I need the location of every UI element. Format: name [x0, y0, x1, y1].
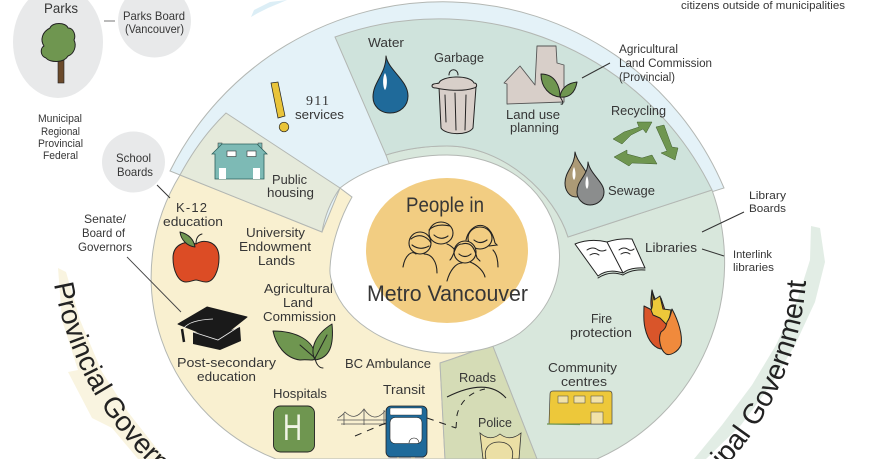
bubble: School Boards: School [116, 151, 151, 165]
icon: water drop [373, 56, 408, 113]
label: Agricultural Land Commission (cream): Agricultural [264, 281, 333, 296]
label: Senate / Board of Governors: Senate/ [84, 212, 127, 226]
label: Garbage: Garbage [434, 50, 484, 65]
label: Community centres: centres [561, 374, 608, 389]
icon: hospital: H [283, 407, 302, 448]
dashed route to police [456, 389, 485, 428]
label: Community centres: Community [548, 360, 618, 375]
icon: land use buildings with leaves [504, 46, 577, 104]
connector: Library Boards [702, 212, 744, 232]
panel: regional services (teal) [335, 19, 712, 237]
legend text: levels of government [38, 113, 83, 162]
label: Agricultural Land Commission (Provincial) [619, 44, 712, 84]
heading: People in Metro Vancouver: Metro Vancouver [367, 281, 528, 306]
bubble: Parks Board: Parks Board [123, 9, 185, 23]
label: Water: Water [368, 35, 405, 50]
label: K-12 education [163, 200, 223, 229]
brush wash: provincial [58, 268, 165, 459]
heading: People in Metro Vancouver [367, 194, 528, 306]
connector: School Boards [157, 185, 170, 198]
label: K-12 education: education [163, 214, 223, 229]
legend text: levels of government: Provincial [38, 138, 83, 150]
label: Public housing: Public [272, 172, 307, 187]
label: Agricultural Land Commission (Provincial): (Provincial) [619, 72, 675, 84]
icon: road [447, 387, 506, 398]
connector: Parks to Parks Board [104, 20, 115, 22]
label: Land use planning: planning [510, 120, 559, 135]
label: Interlink libraries [733, 249, 775, 274]
label: Recycling: Recycling [611, 103, 666, 118]
panel: municipal ring (pale green) [386, 146, 725, 459]
label: Senate / Board of Governors [78, 212, 132, 254]
label: Land use planning: Land use [506, 107, 560, 122]
label: Fire protection: protection [570, 325, 632, 340]
icon: bus [386, 406, 427, 459]
label: Library Boards: Library [749, 190, 787, 202]
label: Roads: Roads [459, 370, 496, 385]
connector: Interlink [702, 249, 724, 256]
label: Interlink libraries: Interlink [733, 249, 772, 261]
label: University Endowment Lands: Lands [258, 253, 296, 268]
icon: exclamation [271, 82, 289, 132]
label: 911 services: services [295, 107, 345, 122]
bubble: Parks Board [118, 0, 191, 58]
label: Sewage: Sewage [608, 183, 655, 198]
label: Agricultural Land Commission (cream): Land [283, 295, 313, 310]
label: Interlink libraries: libraries [733, 262, 775, 274]
label: University Endowment Lands: Endowment [239, 239, 311, 254]
icon: recycling arrows [613, 122, 678, 166]
brush wash: top [251, 0, 287, 17]
label: K-12 education: K-12 [176, 200, 207, 215]
label: Public housing [267, 172, 314, 200]
legend text: levels of government: Federal [43, 150, 78, 162]
icon: hospital [274, 406, 314, 452]
connector: Agricultural Land Commission [582, 63, 610, 78]
panel: provincial and municipal services (blue) [170, 2, 724, 250]
panel: public housing [180, 113, 340, 232]
label: Police: Police [478, 415, 512, 430]
icon: house [212, 143, 267, 179]
connector: Senate [127, 257, 181, 312]
label: Parks: Parks [44, 0, 78, 16]
label: Post-secondary education [177, 355, 277, 384]
label: Agricultural Land Commission (Provincial): Land Commission [619, 58, 712, 70]
icon: garbage can [432, 70, 477, 134]
legend text: levels of government: Regional [41, 126, 80, 138]
label: Transit: Transit [383, 382, 425, 397]
label: 911 services: 911 [306, 94, 329, 109]
icon: police badge [480, 433, 521, 459]
label: Post-secondary education: education [197, 369, 256, 384]
label: University Endowment Lands: University [246, 225, 306, 240]
label: University Endowment Lands [239, 225, 311, 268]
label: Libraries: Libraries [645, 240, 698, 255]
icon: people [403, 222, 498, 281]
legend text: levels of government: Municipal [38, 113, 82, 125]
label: Fire protection [570, 311, 632, 340]
panel: roads and police (olive) [440, 344, 537, 459]
label: Library Boards [749, 190, 787, 215]
bubble: Parks [13, 0, 103, 98]
label: Hospitals: Hospitals [273, 386, 328, 401]
label: Agricultural Land Commission (cream): Commission [263, 309, 336, 324]
label: Agricultural Land Commission (cream) [263, 281, 336, 324]
icon: apple [173, 232, 219, 282]
label: Library Boards: Boards [749, 203, 787, 215]
bubble: Parks Board: (Vancouver) [125, 24, 184, 36]
icon: book [575, 239, 645, 278]
icon: community centre [547, 391, 612, 424]
label: Post-secondary education: Post-secondary [177, 355, 277, 370]
bubble: School Boards [102, 132, 165, 192]
centre orange circle [366, 178, 528, 323]
label: BC Ambulance: BC Ambulance [345, 356, 431, 371]
label: Land use planning [506, 107, 560, 135]
top right note: citizens outside of municipalities [681, 0, 846, 12]
label: Senate / Board of Governors: Board of [82, 226, 126, 240]
label: Agricultural Land Commission (Provincial): Agricultural [619, 44, 678, 56]
icon: bridge [337, 409, 386, 425]
icon: fire [644, 290, 681, 355]
label: 911 services [295, 94, 345, 122]
icon: tree [41, 24, 75, 83]
label: Community centres [548, 360, 618, 389]
label: Senate / Board of Governors: Governors [78, 240, 132, 254]
label: Public housing: housing [267, 185, 314, 200]
icon: sewage drops [565, 152, 604, 205]
centre white blob [330, 155, 559, 353]
panel: provincial services (cream) [151, 175, 500, 459]
heading: People in Metro Vancouver: People in [406, 194, 484, 217]
brush wash: municipal [694, 226, 825, 459]
icon: graduation cap [178, 307, 247, 350]
bubble: School Boards: Boards [117, 165, 153, 179]
curved heading: Provincial Government [54, 282, 166, 459]
transit dashed route [355, 418, 456, 436]
icon: leaves [273, 324, 332, 368]
label: Fire protection: Fire [591, 311, 612, 326]
